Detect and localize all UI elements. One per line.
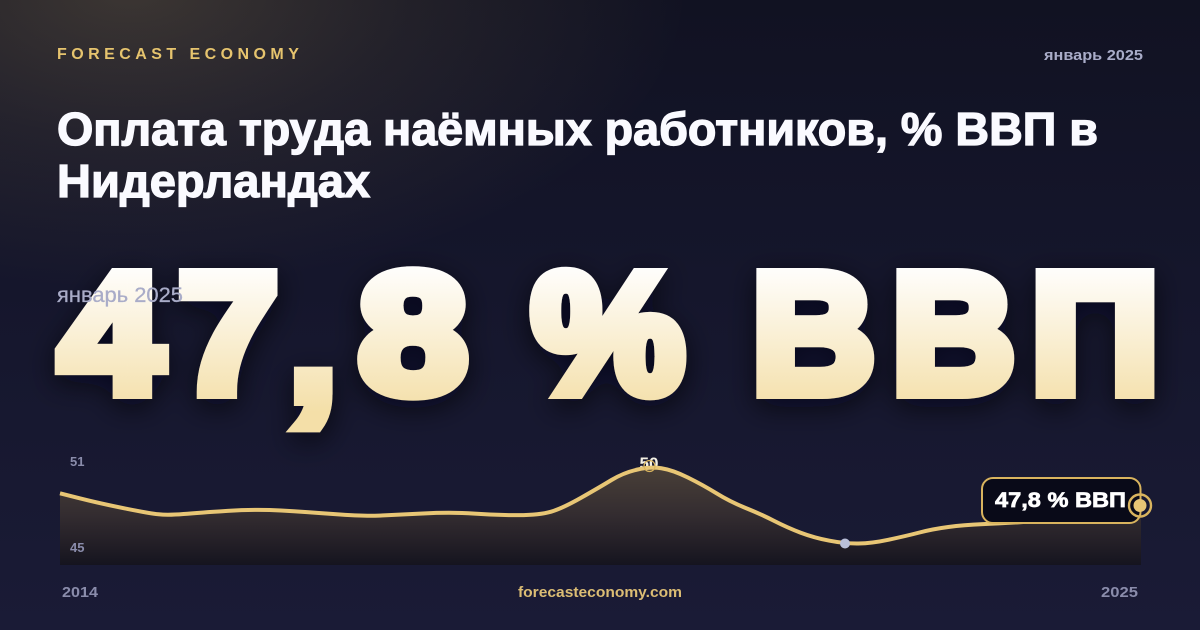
big value: 8	[359, 239, 467, 429]
title	[57, 103, 1098, 207]
big value	[60, 239, 1159, 436]
date overlay: январь 2025	[57, 284, 183, 307]
end year: 2025	[1101, 584, 1138, 601]
big value: %	[532, 239, 684, 429]
value callout	[982, 478, 1140, 523]
end marker	[1129, 494, 1151, 516]
chart area	[60, 468, 1141, 565]
brand label: FORECAST ECONOMY	[57, 46, 303, 63]
start year: 2014	[62, 584, 99, 601]
peak value label: 50	[640, 454, 658, 473]
title: Оплата труда наёмных работников, % ВВП в	[57, 103, 1098, 155]
value callout: 47,8 % ВВП	[995, 489, 1126, 512]
big value: 7	[178, 239, 278, 429]
peak marker	[644, 460, 655, 472]
big value: В	[752, 239, 875, 429]
axis label 45: 45	[70, 540, 84, 555]
big value: В	[892, 239, 1015, 429]
minimum marker	[840, 538, 850, 548]
chart	[60, 454, 1151, 565]
axis label 51: 51	[70, 454, 84, 469]
big value: 4	[60, 239, 162, 429]
big value: ,	[289, 246, 337, 436]
source: forecasteconomy.com	[518, 584, 682, 601]
title: Нидерландах	[57, 155, 370, 207]
chart line	[60, 468, 1140, 544]
date top right: январь 2025	[1044, 47, 1143, 64]
big value: П	[1031, 239, 1159, 429]
